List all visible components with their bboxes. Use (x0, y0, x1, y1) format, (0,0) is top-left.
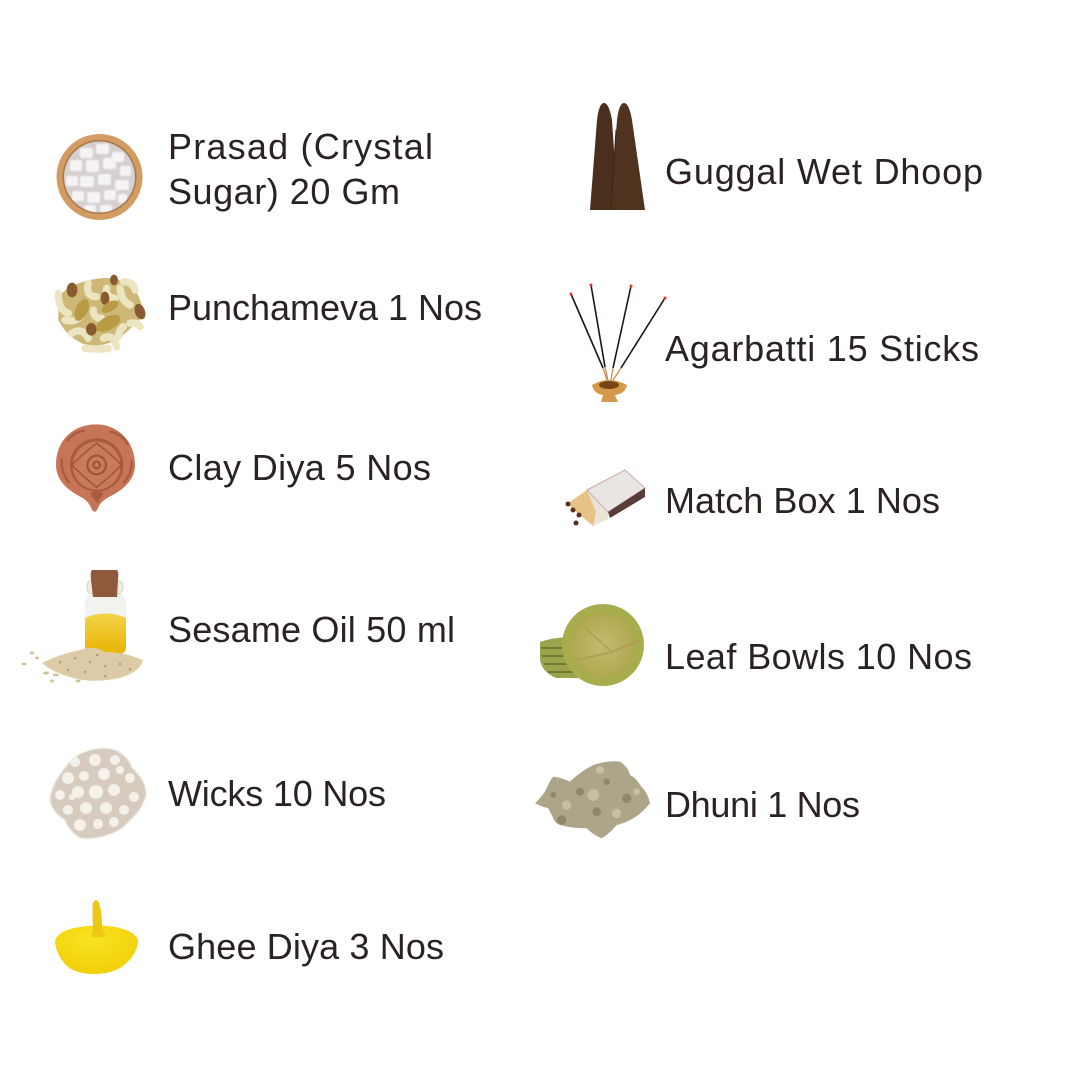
text: Punchameva: Punchameva 1 Nos (168, 287, 482, 328)
text: Prasad (168, 126, 433, 212)
icon: match box (566, 470, 645, 526)
text: Wicks: Wicks 10 Nos (168, 773, 386, 814)
icon: ghee diya (55, 900, 138, 974)
icon: sesame oil bottle with seeds (22, 570, 143, 682)
text: Ghee Diya: Ghee Diya 3 Nos (168, 926, 444, 967)
text: Match Box: Match Box 1 Nos (665, 480, 940, 521)
text: Leaf Bowls: Leaf Bowls 10 Nos (665, 636, 972, 677)
icon: agarbatti sticks with holder (570, 284, 666, 402)
text: Sesame Oil: Sesame Oil 50 ml (168, 609, 455, 650)
text: Clay Diya: Clay Diya 5 Nos (168, 447, 431, 488)
icon: cotton wicks (50, 748, 146, 838)
icon: punchameva dry fruits (58, 275, 147, 349)
icon: guggal wet dhoop cones (590, 103, 645, 210)
text: Dhuni: Dhuni 1 Nos (665, 784, 860, 825)
text: Guggal Wet Dhoop: Guggal Wet Dhoop (665, 151, 983, 192)
icon: crystal sugar bowl (56, 134, 142, 220)
text: Prasad: Prasad (Crystal (168, 126, 433, 167)
text: Agarbatti: Agarbatti 15 Sticks (665, 328, 979, 369)
icon: dhuni powder (535, 761, 650, 838)
icon: clay diya (56, 424, 135, 512)
text: Prasad: Sugar) 20 Gm (168, 171, 400, 212)
icon: leaf bowls stack (540, 604, 644, 686)
